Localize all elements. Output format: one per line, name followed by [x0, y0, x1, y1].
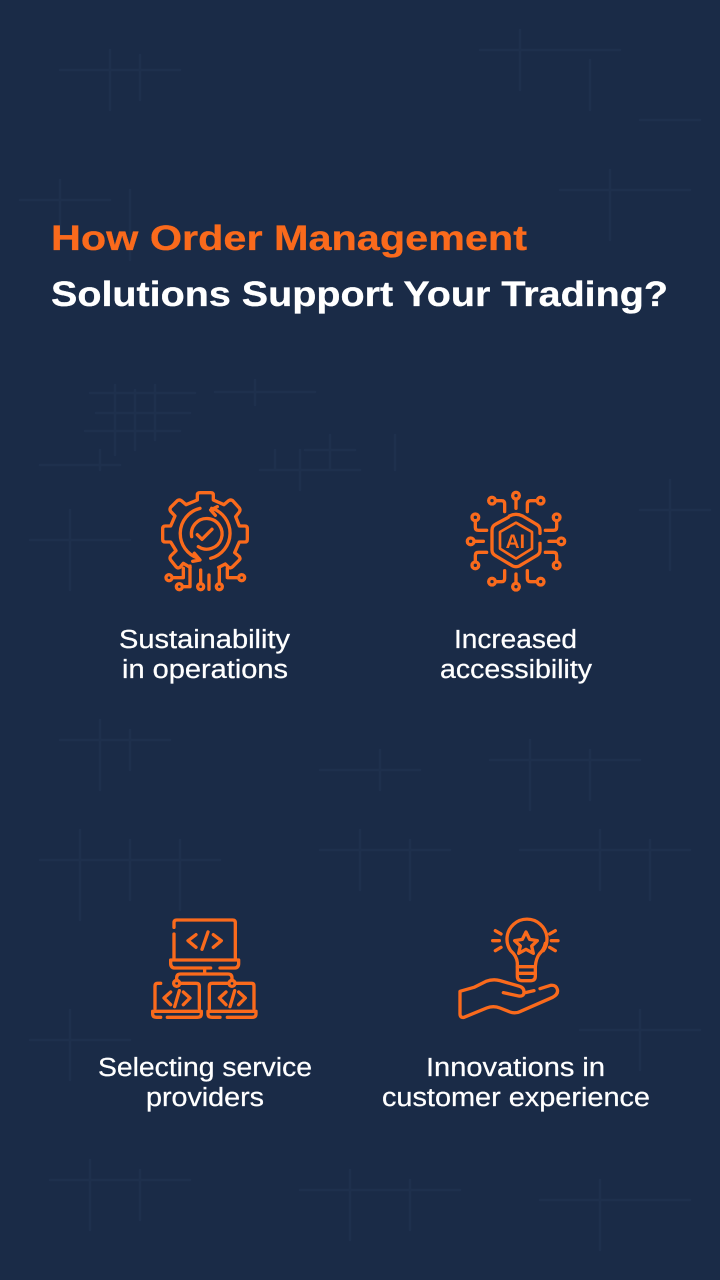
title: How Order Management	[51, 219, 527, 258]
label: Sustainability	[119, 626, 290, 654]
panel: sustainability in operations	[119, 493, 290, 684]
label: accessibility	[440, 656, 592, 684]
icon: AI chip: AI	[506, 532, 525, 553]
panel: selecting service providers	[98, 920, 312, 1112]
icon: three networked laptops with code	[153, 920, 256, 1017]
label	[119, 626, 290, 684]
icon: hand holding lightbulb with star	[460, 919, 558, 1017]
label: customer experience	[382, 1084, 650, 1112]
panel: increased accessibility	[440, 492, 592, 684]
label: Increased	[454, 626, 577, 654]
icon: AI chip	[467, 492, 565, 590]
title	[51, 219, 668, 314]
icon: gear with check and circuits	[163, 493, 247, 590]
title: Solutions Support Your Trading?	[51, 275, 668, 314]
label: providers	[146, 1084, 264, 1112]
label: Innovations in	[426, 1054, 605, 1082]
label: in operations	[122, 656, 288, 684]
label	[98, 1054, 312, 1112]
label	[440, 626, 592, 684]
panel: innovations in customer experience	[382, 919, 650, 1112]
label	[382, 1054, 650, 1112]
label: Selecting service	[98, 1054, 312, 1082]
